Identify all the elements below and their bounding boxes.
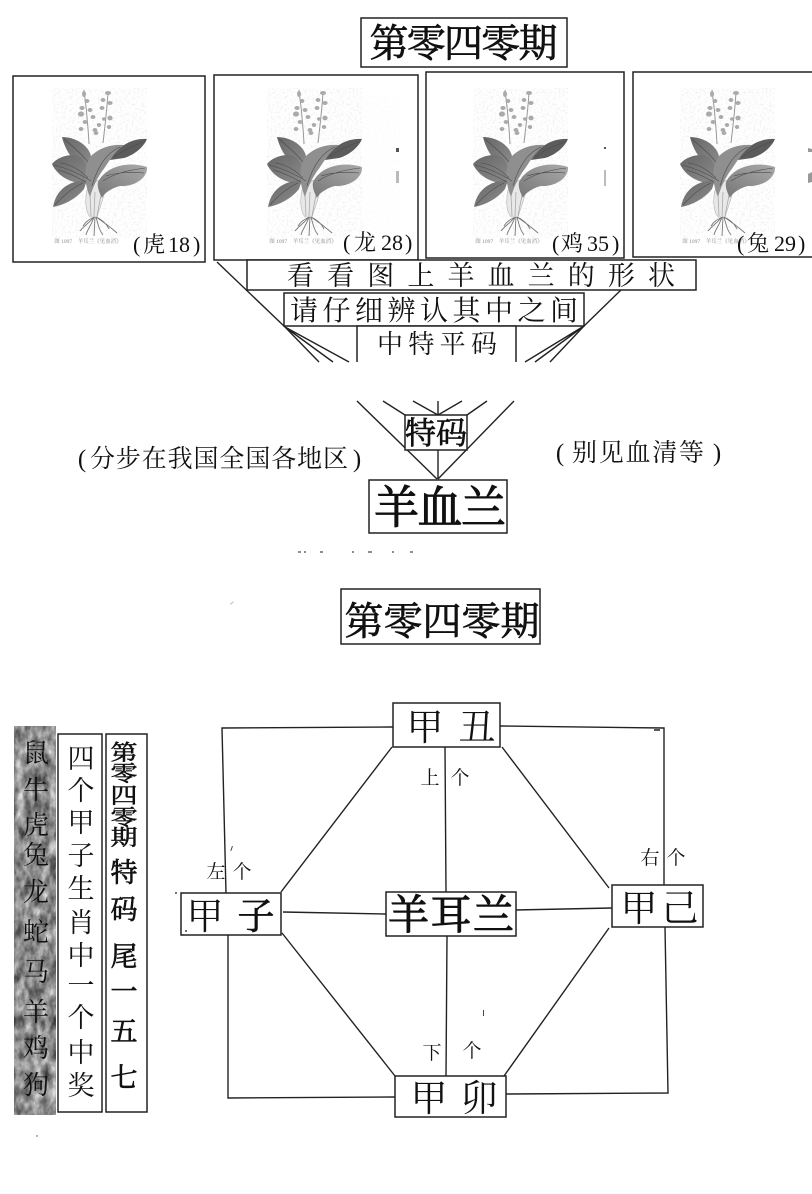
column: four jiazi zodiac text: 甲 — [68, 808, 94, 838]
banner: clipped plain code box: 中特平码 — [377, 330, 497, 359]
node: jia chou — [393, 703, 500, 749]
panel: plant image rooster 35: ( — [552, 231, 559, 256]
node: jia mao: 甲 — [410, 1079, 448, 1120]
column: issue special code tail: 一 — [110, 977, 138, 1007]
panel: plant image rooster 35: 鸡 — [561, 231, 583, 256]
banner: identify carefully: 请仔细辨认其中之间 — [290, 295, 578, 327]
node: jia chou: 丑 — [458, 708, 496, 749]
labels: left — [206, 861, 252, 883]
node: jia mao: 卯 — [460, 1079, 498, 1120]
column: zodiac animals on grey: 虎 — [23, 811, 49, 840]
panel: plant image tiger 18 — [13, 76, 205, 262]
note: left distribution text: 分步在我国全国各地区 — [90, 445, 348, 473]
column: issue special code tail: 零 — [111, 806, 137, 830]
note: left distribution text: ) — [353, 446, 361, 473]
note: left distribution text: ( — [78, 446, 86, 473]
column: zodiac animals on grey: 鼠 — [23, 739, 49, 768]
panel: plant image dragon 28: 龙 — [354, 230, 376, 255]
column: zodiac animals on grey: 马 — [23, 958, 49, 987]
column: four jiazi zodiac text: 肖 — [68, 908, 94, 938]
panel: plant image rooster 35: ) — [612, 231, 619, 256]
column: four jiazi zodiac text: 生 — [68, 874, 94, 904]
node: jia ji: 甲 — [620, 889, 658, 930]
node: jia zi — [181, 893, 281, 938]
column: issue special code tail — [106, 734, 147, 1112]
note: right alias text: ) — [713, 440, 721, 467]
banner: clipped plain code box — [357, 326, 516, 362]
panel: plant image rabbit 29 — [633, 72, 812, 257]
column: four jiazi zodiac text: 子 — [68, 841, 94, 871]
diagram: outer connector lines — [222, 726, 668, 1098]
node: jia zi: 甲 — [186, 897, 224, 938]
panel: plant image tiger 18: 18 — [168, 232, 190, 257]
node: jia zi: 子 — [238, 897, 274, 938]
panel: plant image dragon 28: ( — [343, 230, 350, 255]
column: issue special code tail: 零 — [111, 762, 137, 786]
node: jia ji: 己 — [662, 889, 698, 930]
node: jia chou: 甲 — [406, 708, 444, 749]
column: zodiac animals on grey: 鸡 — [23, 1034, 49, 1063]
panel: plant image rabbit 29: ) — [798, 231, 805, 256]
column: four jiazi zodiac text — [58, 734, 102, 1112]
labels: left: 个 — [232, 861, 252, 883]
column: four jiazi zodiac text: 一 — [68, 971, 94, 1001]
column: issue special code tail: 四 — [111, 784, 137, 808]
note: right alias text: ( — [556, 440, 564, 467]
labels: bottom — [422, 1040, 482, 1064]
banner: look at the shape: 看看图上羊血兰的形状 — [287, 261, 675, 291]
column: zodiac animals on grey: 兔 — [23, 841, 49, 870]
panel: plant image rabbit 29: ( — [737, 231, 744, 256]
column: zodiac animals on grey: 龙 — [23, 878, 49, 907]
column: four jiazi zodiac text: 中 — [68, 1038, 94, 1068]
column: zodiac animals on grey — [14, 726, 56, 1115]
column: four jiazi zodiac text: 奖 — [68, 1071, 94, 1101]
column: four jiazi zodiac text: 四 — [68, 744, 94, 774]
labels: top: 个 — [450, 767, 470, 789]
labels: top — [420, 767, 470, 789]
panel: plant image rooster 35 — [426, 72, 624, 258]
panel: plant image dragon 28 — [214, 75, 418, 260]
labels: right: 右 — [640, 847, 660, 869]
column: zodiac animals on grey: 牛 — [23, 776, 49, 805]
panel: plant image dragon 28: 28 — [381, 230, 403, 255]
column: four jiazi zodiac text: 个 — [68, 1003, 94, 1033]
box: special code: 特码 — [405, 416, 467, 451]
title: second issue heading: 第零四零期 — [344, 601, 540, 644]
panel: plant image rabbit 29: 兔 — [747, 231, 769, 256]
panel: plant image tiger 18: ( — [133, 232, 140, 257]
panel: plant image tiger 18: 虎 — [143, 232, 165, 257]
box: yang xue lan: 羊血兰 — [374, 483, 506, 533]
funnel diagram: upper connector lines — [217, 262, 623, 362]
note: right alias text: 别见血清等 — [572, 439, 704, 467]
column: four jiazi zodiac text: 个 — [68, 776, 94, 806]
column: issue special code tail: 特 — [110, 858, 138, 888]
node: center yang er lan: 羊耳兰 — [388, 892, 514, 938]
panel: plant image rabbit 29: 29 — [774, 231, 796, 256]
node: jia ji — [612, 885, 703, 930]
labels: left: 左 — [206, 861, 226, 883]
column: issue special code tail: 七 — [110, 1063, 138, 1093]
panel: plant image rooster 35: 35 — [587, 231, 609, 256]
scan specks — [36, 601, 484, 1137]
column: zodiac animals on grey: 狗 — [23, 1071, 49, 1100]
labels: bottom: 个 — [462, 1040, 482, 1062]
column: issue special code tail: 尾 — [110, 942, 138, 972]
funnel diagram: lower connector lines — [357, 401, 514, 479]
column: zodiac animals on grey: 羊 — [23, 998, 49, 1027]
title: top issue heading: 第零四零期 — [370, 23, 558, 66]
clipped text remnant — [298, 551, 413, 553]
column: issue special code tail: 五 — [110, 1017, 138, 1047]
column: four jiazi zodiac text: 中 — [68, 941, 94, 971]
labels: top: 上 — [420, 767, 440, 789]
column: issue special code tail: 期 — [111, 826, 137, 850]
labels: right: 个 — [666, 847, 686, 869]
node: jia mao — [395, 1076, 506, 1120]
column: zodiac animals on grey: 蛇 — [23, 918, 49, 947]
panel: plant image tiger 18: ) — [193, 232, 200, 257]
labels: bottom: 下 — [422, 1042, 442, 1064]
labels: right — [640, 847, 686, 869]
column: issue special code tail: 第 — [111, 741, 137, 765]
panel: plant image dragon 28: ) — [405, 230, 412, 255]
column: issue special code tail: 码 — [110, 895, 138, 925]
